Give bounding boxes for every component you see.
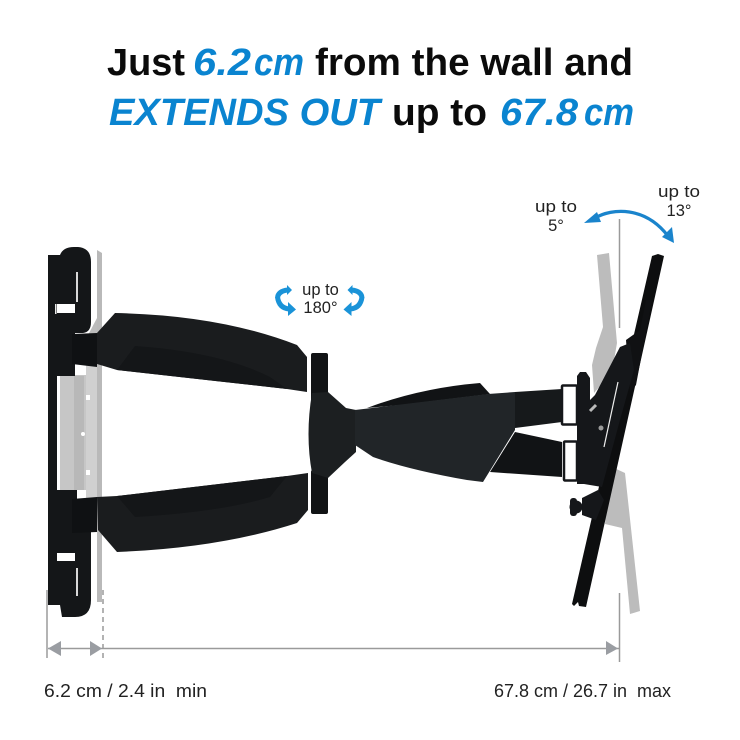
title	[107, 42, 634, 134]
centre elbow joint	[308, 392, 356, 478]
rotation label: 180°	[303, 299, 338, 317]
reference lines	[47, 219, 620, 662]
rotation label	[302, 281, 339, 317]
tilt label: up to 13 degrees	[658, 183, 700, 220]
lower arm	[72, 473, 308, 552]
title: 67.8	[500, 92, 579, 134]
title: cm	[254, 42, 304, 84]
label: maximum distance: 67.8 cm / 26.7 in max	[494, 681, 671, 701]
title: Just	[107, 42, 185, 84]
TV bracket	[570, 254, 664, 607]
rotation arrows left	[278, 285, 296, 316]
title: from the wall and	[315, 42, 633, 84]
label: minimum distance: 6.2 cm / 2.4 in min	[44, 681, 207, 701]
title: EXTENDS OUT	[109, 92, 383, 134]
tilt label: up to 5 degrees	[535, 198, 577, 235]
ghost: gray tilted TV bracket	[592, 253, 640, 614]
tilt label: up to 13 degrees: up to	[658, 183, 700, 201]
title: up to	[392, 92, 487, 134]
tilt label: up to 5 degrees: 5°	[548, 217, 564, 235]
tilt label: up to 5 degrees: up to	[535, 198, 577, 216]
wall plate	[48, 247, 91, 617]
tilt label: up to 13 degrees: 13°	[667, 202, 691, 220]
dimension arrows	[48, 641, 619, 656]
rotation label: up to	[302, 281, 339, 299]
title: 6.2	[193, 42, 251, 84]
ghost: gray retracted wall plate	[60, 250, 102, 602]
arm clamps	[562, 386, 577, 480]
rotation arrows right	[344, 285, 362, 316]
tilt arc arrow	[584, 211, 674, 243]
title: cm	[584, 92, 634, 134]
pivot poles	[311, 353, 328, 514]
forearm	[355, 383, 562, 482]
upper arm	[72, 313, 307, 392]
